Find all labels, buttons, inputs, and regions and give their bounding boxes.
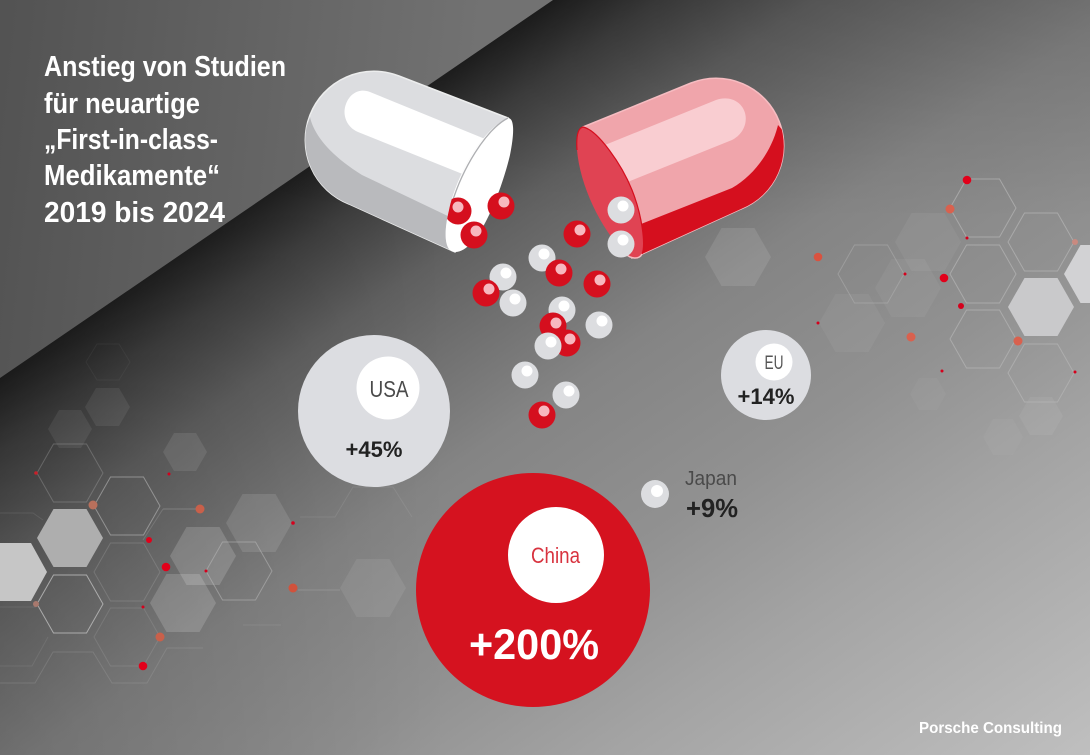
capsule body red <box>583 78 784 258</box>
capsule shadow <box>305 117 454 252</box>
bubble: China +200%: +200% <box>469 621 599 669</box>
bubble: USA +45%: +45% <box>346 437 402 462</box>
capsule opening <box>446 118 513 252</box>
bubble: EU +14% <box>721 330 811 420</box>
capsule: white half <box>304 70 514 253</box>
bubble: Japan +9%: Japan <box>685 468 737 490</box>
bubble: EU +14%: +14% <box>738 384 794 409</box>
bubble: USA +45%: USA <box>370 376 409 402</box>
capsule body white <box>305 71 508 252</box>
bubble: China +200%: China <box>531 543 581 568</box>
capsule shadow red <box>642 125 784 254</box>
title: für neuartige <box>44 88 200 120</box>
capsule highlight red <box>600 98 746 183</box>
pills scattered <box>444 192 634 428</box>
title: Medikamente“ <box>44 160 220 192</box>
hexagon network: left <box>0 344 412 683</box>
title: 2019 bis 2024 <box>44 197 225 229</box>
bubble: China +200% <box>416 473 650 707</box>
capsule highlight <box>344 91 490 177</box>
title <box>44 51 286 229</box>
title: „First-in-class- <box>44 124 218 156</box>
bubble: EU +14%: EU <box>764 353 784 374</box>
hexagon network: right <box>705 176 1090 455</box>
bubble: USA +45% <box>298 335 450 487</box>
capsule opening red <box>577 127 644 258</box>
capsule: red half <box>576 78 784 259</box>
logo text: Porsche Consulting <box>919 720 1062 737</box>
title: Anstieg von Studien <box>44 51 286 83</box>
bubble: Japan +9%: +9% <box>686 493 738 523</box>
bubble: Japan +9% <box>641 468 738 523</box>
